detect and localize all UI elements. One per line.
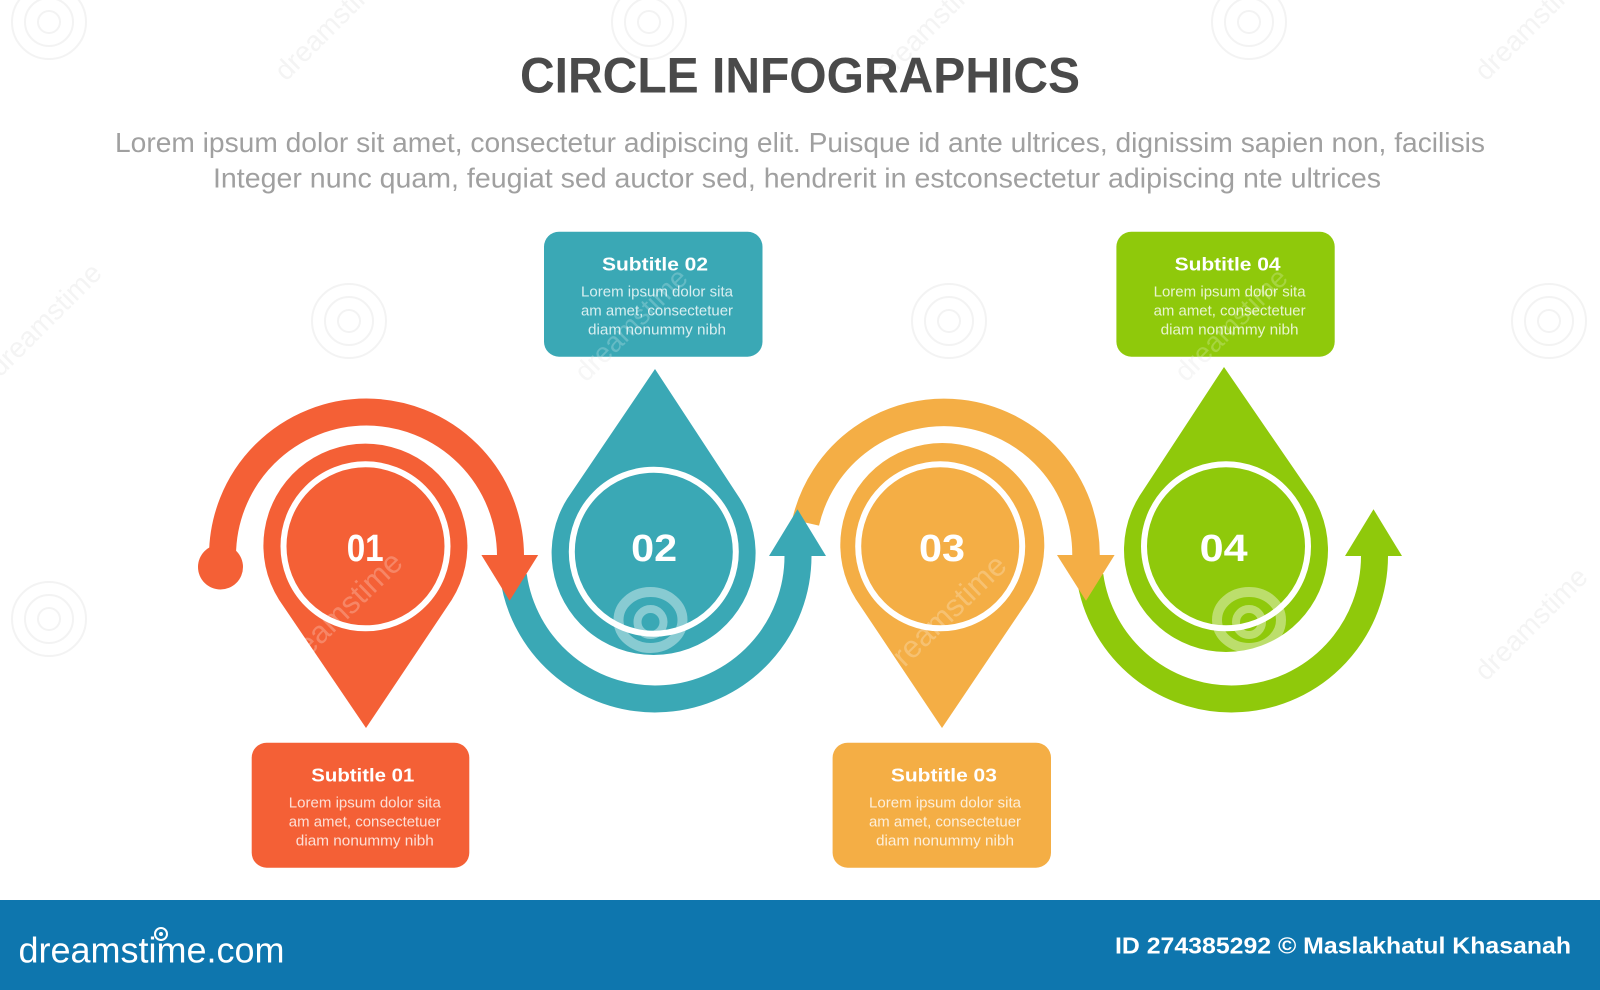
panel: subtitle 04 <box>1116 232 1335 387</box>
marker 04: green drop: 04 <box>1200 528 1248 570</box>
panel: subtitle 04: Lorem ipsum dolor sita <box>1154 284 1307 300</box>
panel: subtitle 04: am amet, consectetuer <box>1154 304 1306 320</box>
infographic canvas: dreamstime <box>568 262 694 387</box>
marker 03: amber pin: 03 <box>919 528 965 570</box>
marker 03: amber pin <box>840 443 1044 728</box>
arrow: amber upper arc <box>806 412 1115 601</box>
panel: subtitle 04: dreamstime <box>1168 262 1294 387</box>
marker 02: teal drop <box>552 369 756 655</box>
panel: subtitle 02: Lorem ipsum dolor sita <box>581 284 734 300</box>
marker 01: orange pin: dreamstime <box>269 544 409 682</box>
panel: subtitle 02: diam nonummy nibh <box>588 322 726 338</box>
subtitle text: Integer nunc quam, feugiat sed auctor sed, hendrerit in estconsectetur adipiscing nte ultrices <box>213 162 1381 194</box>
panel: subtitle 02: Subtitle 02 <box>602 254 708 274</box>
panel: subtitle 02: dreamstime <box>568 262 694 387</box>
marker 04: green drop <box>1124 367 1328 652</box>
subtitle text: Lorem ipsum dolor sit amet, consectetur adipiscing elit. Puisque id ante ultrices, dignissim sapien non, facilisis <box>115 127 1485 158</box>
infographic canvas: dreamstime <box>1168 262 1294 387</box>
footer logo: dreamstime.com <box>18 930 284 970</box>
arrow: green lower arc <box>1090 509 1402 699</box>
footer credit: ID 274385292 © Maslakhatul Khasanah <box>1115 932 1571 958</box>
panel: subtitle 03: Lorem ipsum dolor sita <box>869 795 1022 811</box>
footer bar <box>0 900 1600 990</box>
panel: subtitle 04: Subtitle 04 <box>1175 254 1281 274</box>
panel: subtitle 02 <box>544 232 762 387</box>
panel: subtitle 01: Subtitle 01 <box>311 766 414 786</box>
panel: subtitle 03: diam nonummy nibh <box>876 834 1014 850</box>
infographic canvas: dreamstime <box>1468 561 1594 686</box>
panel: subtitle 01: am amet, consectetuer <box>289 814 441 830</box>
panel: subtitle 02: am amet, consectetuer <box>581 304 733 320</box>
marker 02: teal drop: 02 <box>631 528 677 570</box>
panel: subtitle 04: diam nonummy nibh <box>1161 322 1299 338</box>
arrow: orange upper arc with start dot <box>198 412 538 601</box>
panel: subtitle 03: am amet, consectetuer <box>869 814 1021 830</box>
marker 03: amber pin: dreamstime <box>873 547 1013 685</box>
marker 01: orange pin: 01 <box>347 528 384 570</box>
title: CIRCLE INFOGRAPHICS <box>520 48 1080 104</box>
panel: subtitle 01 <box>252 743 469 868</box>
panel: subtitle 01: Lorem ipsum dolor sita <box>289 795 442 811</box>
marker 01: orange pin <box>263 444 467 728</box>
panel: subtitle 03 <box>833 743 1051 868</box>
panel: subtitle 03: Subtitle 03 <box>891 766 997 786</box>
arrow: teal lower arc <box>513 509 826 699</box>
subtitle text <box>115 127 1485 194</box>
panel: subtitle 01: diam nonummy nibh <box>296 834 434 850</box>
